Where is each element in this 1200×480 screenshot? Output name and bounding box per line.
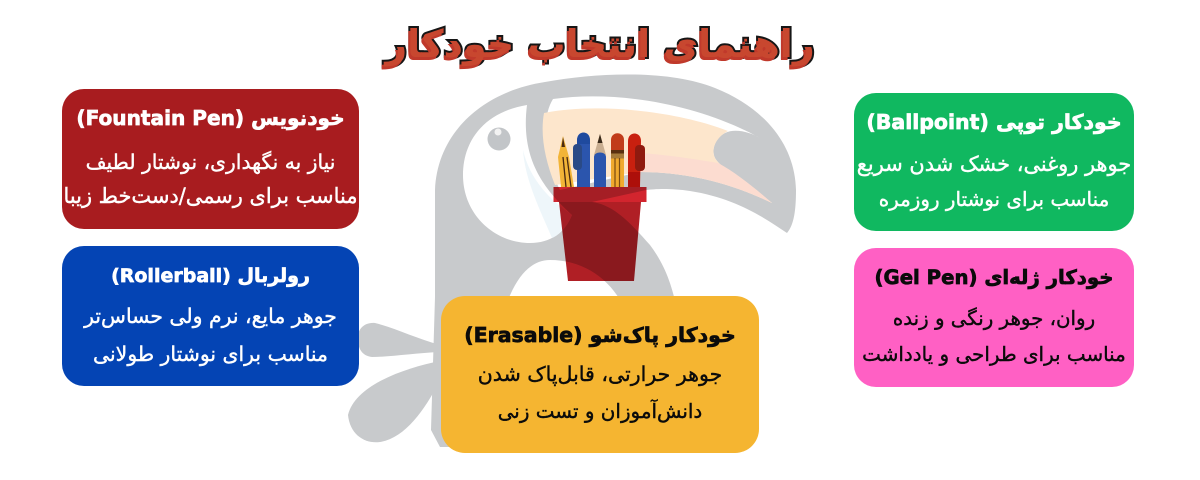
toucan beak pink band: [640, 153, 772, 203]
eye patch soft blue shading: [523, 150, 572, 238]
cup rim: [554, 187, 646, 202]
text: erasable properties: جوهر حرارتی، قابل‌پاک شدن: [478, 362, 722, 386]
text: gel pen properties: روان، جوهر رنگی و زنده: [893, 307, 1095, 330]
panel: rollerball: [62, 246, 359, 386]
text: rollerball properties: جوهر مایع، نرم ولی حساس‌تر: [84, 304, 337, 328]
text: ballpoint usage: مناسب برای نوشتار روزمره: [879, 188, 1109, 211]
heading: gel pen: خودکار ژله‌ای (Gel Pen): [875, 266, 1113, 289]
toucan belly cutout: [508, 260, 620, 300]
panel: erasable: [441, 296, 759, 453]
panel: gel pen: [854, 248, 1134, 387]
text: ballpoint properties: جوهر روغنی، خشک شدن سریع: [857, 152, 1131, 176]
heading: rollerball: رولربال (Rollerball): [111, 265, 310, 287]
red pen with clip: [628, 134, 645, 187]
eye highlight: [494, 128, 502, 136]
panel: fountain pen: [62, 89, 359, 229]
blue pencil: [594, 134, 606, 187]
toucan tail feather upper: [358, 323, 440, 357]
heading: ballpoint: خودکار توپی (Ballpoint): [866, 110, 1122, 134]
toucan tail feather lower: [348, 361, 440, 442]
text: fountain pen properties: نیاز به نگهداری، نوشتار لطیف: [86, 150, 335, 174]
text: gel pen usage: مناسب برای طراحی و یادداشت: [862, 343, 1126, 366]
cup body: [559, 202, 641, 281]
orange pencil with eraser: [611, 133, 624, 187]
title: راهنمای انتخاب خودکار: [385, 22, 815, 66]
text: erasable usage: دانش‌آموزان و تست زنی: [498, 400, 702, 423]
toucan eye patch: [463, 105, 572, 243]
toucan beak white edge: [546, 96, 772, 203]
toucan eye: [488, 128, 510, 150]
heading: erasable: خودکار پاک‌شو (Erasable): [464, 323, 736, 347]
yellow pencil: [558, 136, 574, 187]
panel: ballpoint: [854, 93, 1134, 231]
pen holder illustration: [554, 132, 646, 281]
text: fountain pen usage: مناسب برای رسمی/دست‌خط زیبا: [63, 184, 358, 208]
text: rollerball usage: مناسب برای نوشتار طولانی: [93, 342, 328, 366]
heading: fountain pen: خودنویس (Fountain Pen): [76, 106, 345, 130]
toucan body and head silhouette: [431, 74, 796, 447]
blue pen with clip: [573, 132, 590, 187]
toucan beak peach fill: [543, 108, 772, 203]
